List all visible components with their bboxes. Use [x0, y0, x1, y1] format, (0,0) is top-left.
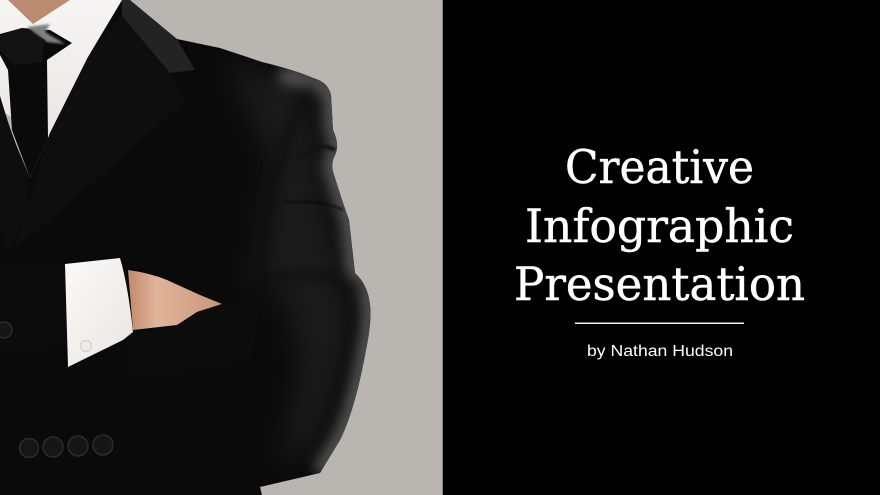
cuff button — [80, 340, 92, 352]
hand — [128, 270, 222, 330]
left lapel — [0, 100, 28, 250]
suit jacket — [0, 0, 370, 495]
title — [514, 140, 805, 311]
shirt — [0, 0, 125, 140]
sleeve buttons — [0, 322, 113, 458]
title: Infographic — [525, 199, 794, 253]
sleeve sheen — [225, 60, 370, 473]
subtitle: by Nathan Hudson — [587, 343, 733, 360]
shirt cuff — [65, 258, 133, 367]
title: Creative — [565, 140, 754, 194]
necktie — [0, 28, 72, 178]
panel background — [443, 0, 880, 495]
photo edge — [442, 0, 443, 495]
lower sleeve — [125, 300, 262, 380]
tie knot — [0, 28, 45, 65]
divider line — [575, 322, 744, 324]
title: Presentation — [514, 257, 805, 311]
photo panel: businessman with crossed arms — [0, 0, 443, 495]
tie knot shadow — [27, 24, 65, 44]
lapel — [14, 16, 186, 250]
jacket collar — [122, 0, 195, 73]
photo background — [0, 0, 443, 495]
neck — [5, 0, 72, 25]
forearm upper sleeve — [0, 263, 70, 352]
title panel — [443, 0, 880, 495]
